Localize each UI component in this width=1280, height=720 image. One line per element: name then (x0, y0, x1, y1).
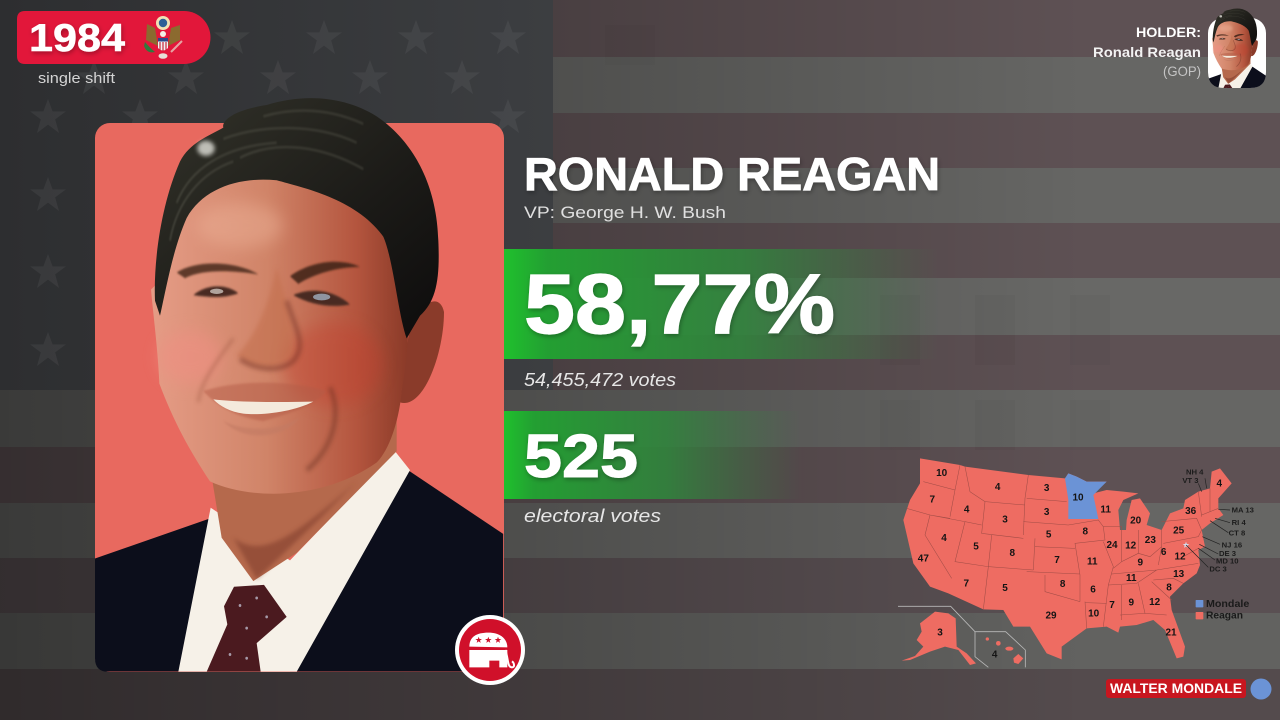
map: electoral vote numbers: 6 (1090, 584, 1096, 595)
map: electoral vote numbers (918, 468, 1223, 660)
map: electoral vote numbers: 7 (1109, 600, 1115, 611)
map: legend: Reagan (1206, 611, 1243, 622)
party logo: Republican elephant (455, 615, 525, 685)
year: 1984 (29, 17, 125, 60)
map: electoral vote numbers: 36 (1185, 506, 1197, 517)
map: electoral vote numbers: 11 (1126, 573, 1137, 584)
map: small state labels: MD 10 (1216, 556, 1239, 565)
map: Minnesota (1065, 473, 1107, 519)
opponent tag: Walter Mondale (1106, 678, 1272, 700)
background: flag canton with stars (0, 0, 553, 390)
map: small state labels: NH 4 (1186, 467, 1204, 476)
map: electoral vote numbers: 10 (1088, 609, 1100, 620)
subtitle: single shift: single shift (38, 71, 115, 87)
portrait card (95, 98, 504, 672)
map: electoral vote numbers: 10 (936, 468, 948, 479)
year badge (17, 11, 211, 64)
map: Alaska (902, 612, 976, 665)
map: electoral vote numbers: 3 (1044, 483, 1050, 494)
map: electoral vote numbers: 10 (1072, 492, 1084, 503)
map: small state labels: DE 3 (1219, 549, 1236, 558)
map: electoral vote numbers: 11 (1087, 556, 1098, 567)
map: electoral vote numbers: 4 (995, 482, 1001, 493)
electoral votes caption: electoral votes (524, 506, 661, 526)
map: electoral vote numbers: 3 (1044, 507, 1050, 518)
holder label: Ronald Reagan (1093, 44, 1201, 60)
map: Hawaii (986, 637, 1023, 664)
map: electoral vote numbers: 29 (1045, 611, 1057, 622)
map: state borders (907, 465, 1218, 628)
map: electoral vote numbers: 20 (1130, 515, 1142, 526)
photo: Ronald Reagan (95, 98, 503, 672)
icon: presidential seal (144, 16, 182, 59)
map: electoral vote numbers: 7 (930, 495, 936, 506)
map: small state labels: DC 3 (1209, 564, 1227, 573)
map: electoral vote numbers: 4 (992, 649, 998, 660)
map: electoral vote numbers: 7 (964, 578, 970, 589)
map: electoral vote numbers: 9 (1138, 558, 1144, 569)
map: electoral vote numbers: 3 (1002, 514, 1008, 525)
map: electoral vote numbers: 9 (1129, 598, 1135, 609)
map: electoral vote numbers: 7 (1054, 555, 1060, 566)
map: DC marker (1183, 542, 1189, 548)
map: small state labels: RI 4 (1232, 518, 1246, 527)
map: electoral vote numbers: 21 (1165, 628, 1177, 639)
map: electoral vote numbers: 4 (1217, 479, 1223, 490)
map: legend: Mondale (1206, 599, 1250, 610)
map: electoral vote numbers: 5 (1002, 583, 1008, 594)
candidate name: RONALD REAGAN (524, 148, 940, 200)
map: electoral vote numbers: 3 (937, 628, 943, 639)
holder label: HOLDER: (1136, 25, 1201, 40)
map: inset frame (898, 606, 1025, 667)
opponent party dot (1250, 678, 1272, 700)
map: electoral vote numbers: 4 (941, 533, 947, 544)
map: electoral vote numbers: 23 (1145, 535, 1156, 546)
opponent tag: Walter Mondale: WALTER MONDALE (1110, 681, 1242, 696)
map: small state labels (1182, 467, 1254, 573)
map: electoral vote numbers: 8 (1083, 526, 1089, 537)
map: electoral vote numbers: 8 (1010, 548, 1016, 559)
holder photo (1208, 8, 1266, 88)
background: faint building and flag (605, 25, 1110, 450)
map: legend (1196, 599, 1250, 622)
holder label (1093, 25, 1201, 79)
map: electoral vote numbers: 47 (918, 553, 929, 564)
map: small state labels: VT 3 (1182, 476, 1199, 485)
map: electoral vote numbers: 12 (1149, 597, 1161, 608)
map: small state labels: CT 8 (1229, 529, 1246, 538)
map: electoral vote numbers: 13 (1173, 569, 1185, 580)
map: electoral vote numbers: 8 (1166, 583, 1172, 594)
running mate: VP: George H. W. Bush (524, 203, 726, 222)
map: electoral vote numbers: 12 (1125, 540, 1137, 551)
map: electoral vote numbers: 5 (1046, 529, 1052, 540)
popular vote bar (504, 249, 940, 359)
map: electoral vote numbers: 5 (973, 541, 979, 552)
map: electoral vote numbers: 12 (1174, 552, 1186, 563)
map: small state labels: NJ 16 (1222, 540, 1242, 549)
holder label: (GOP) (1163, 64, 1201, 79)
electoral vote number: 525 (524, 422, 638, 490)
map: contiguous states (903, 458, 1232, 659)
map: electoral vote numbers: 24 (1106, 540, 1118, 551)
popular vote percentage: 58,77% (524, 257, 835, 351)
electoral vote bar (504, 411, 802, 499)
map: electoral vote numbers: 11 (1100, 504, 1111, 515)
map: electoral vote numbers: 4 (964, 504, 970, 515)
map: leader lines (1186, 478, 1230, 567)
popular vote count: 54,455,472 votes (524, 370, 676, 390)
map: electoral vote numbers: 25 (1173, 525, 1185, 536)
map: electoral vote numbers: 6 (1161, 547, 1167, 558)
electoral map (898, 458, 1254, 667)
map: small state labels: MA 13 (1232, 505, 1254, 514)
map: electoral vote numbers: 8 (1060, 579, 1066, 590)
